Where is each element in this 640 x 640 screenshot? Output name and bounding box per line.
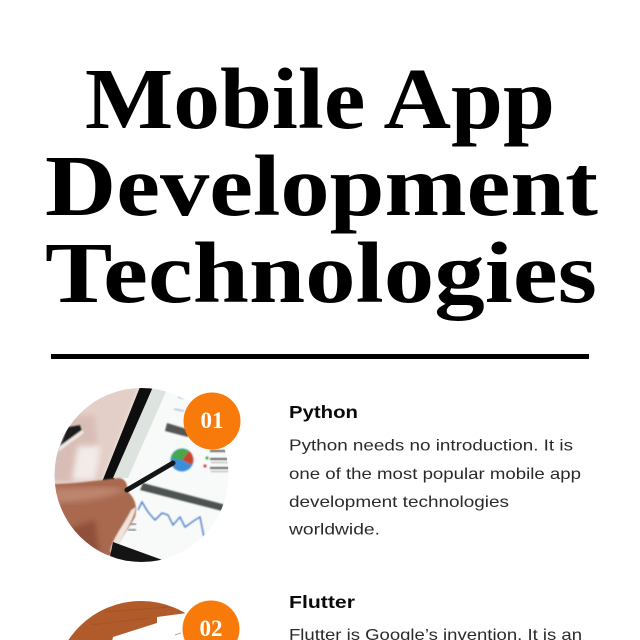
title: Technologies — [45, 224, 597, 321]
dark chart header bars — [165, 423, 190, 437]
chart axis text — [128, 524, 136, 530]
pen — [127, 463, 173, 490]
text block: Python description: worldwide. — [288, 522, 380, 538]
hand — [55, 477, 137, 556]
title: Development — [45, 137, 598, 234]
title divider — [51, 354, 589, 359]
title — [45, 50, 598, 321]
pie chart — [170, 448, 194, 472]
heading: Flutter: Flutter — [289, 592, 355, 612]
title: Mobile App — [85, 50, 555, 147]
badge 01 — [184, 392, 240, 450]
text block: Python description: one of the most popular mobile app — [289, 466, 581, 483]
faint screen text — [174, 397, 188, 411]
badge 02 — [182, 600, 240, 640]
phone — [58, 425, 84, 452]
heading: Python: Python — [289, 402, 358, 422]
tablet inner margin — [113, 387, 168, 478]
badge 01: 01 — [200, 408, 224, 433]
text block: Python description: development technologies — [289, 494, 509, 511]
line chart — [138, 502, 204, 537]
text block: Python description — [288, 438, 581, 538]
tablet bezel — [102, 387, 153, 482]
photo: Flutter wood and white surface — [68, 601, 186, 640]
photo: hand pointing a pen at a tablet chart — [50, 385, 230, 566]
tablet lower bezel — [110, 542, 162, 562]
legend marks — [204, 450, 230, 472]
text block: Python description: Python needs no introduction. It is — [289, 438, 573, 454]
